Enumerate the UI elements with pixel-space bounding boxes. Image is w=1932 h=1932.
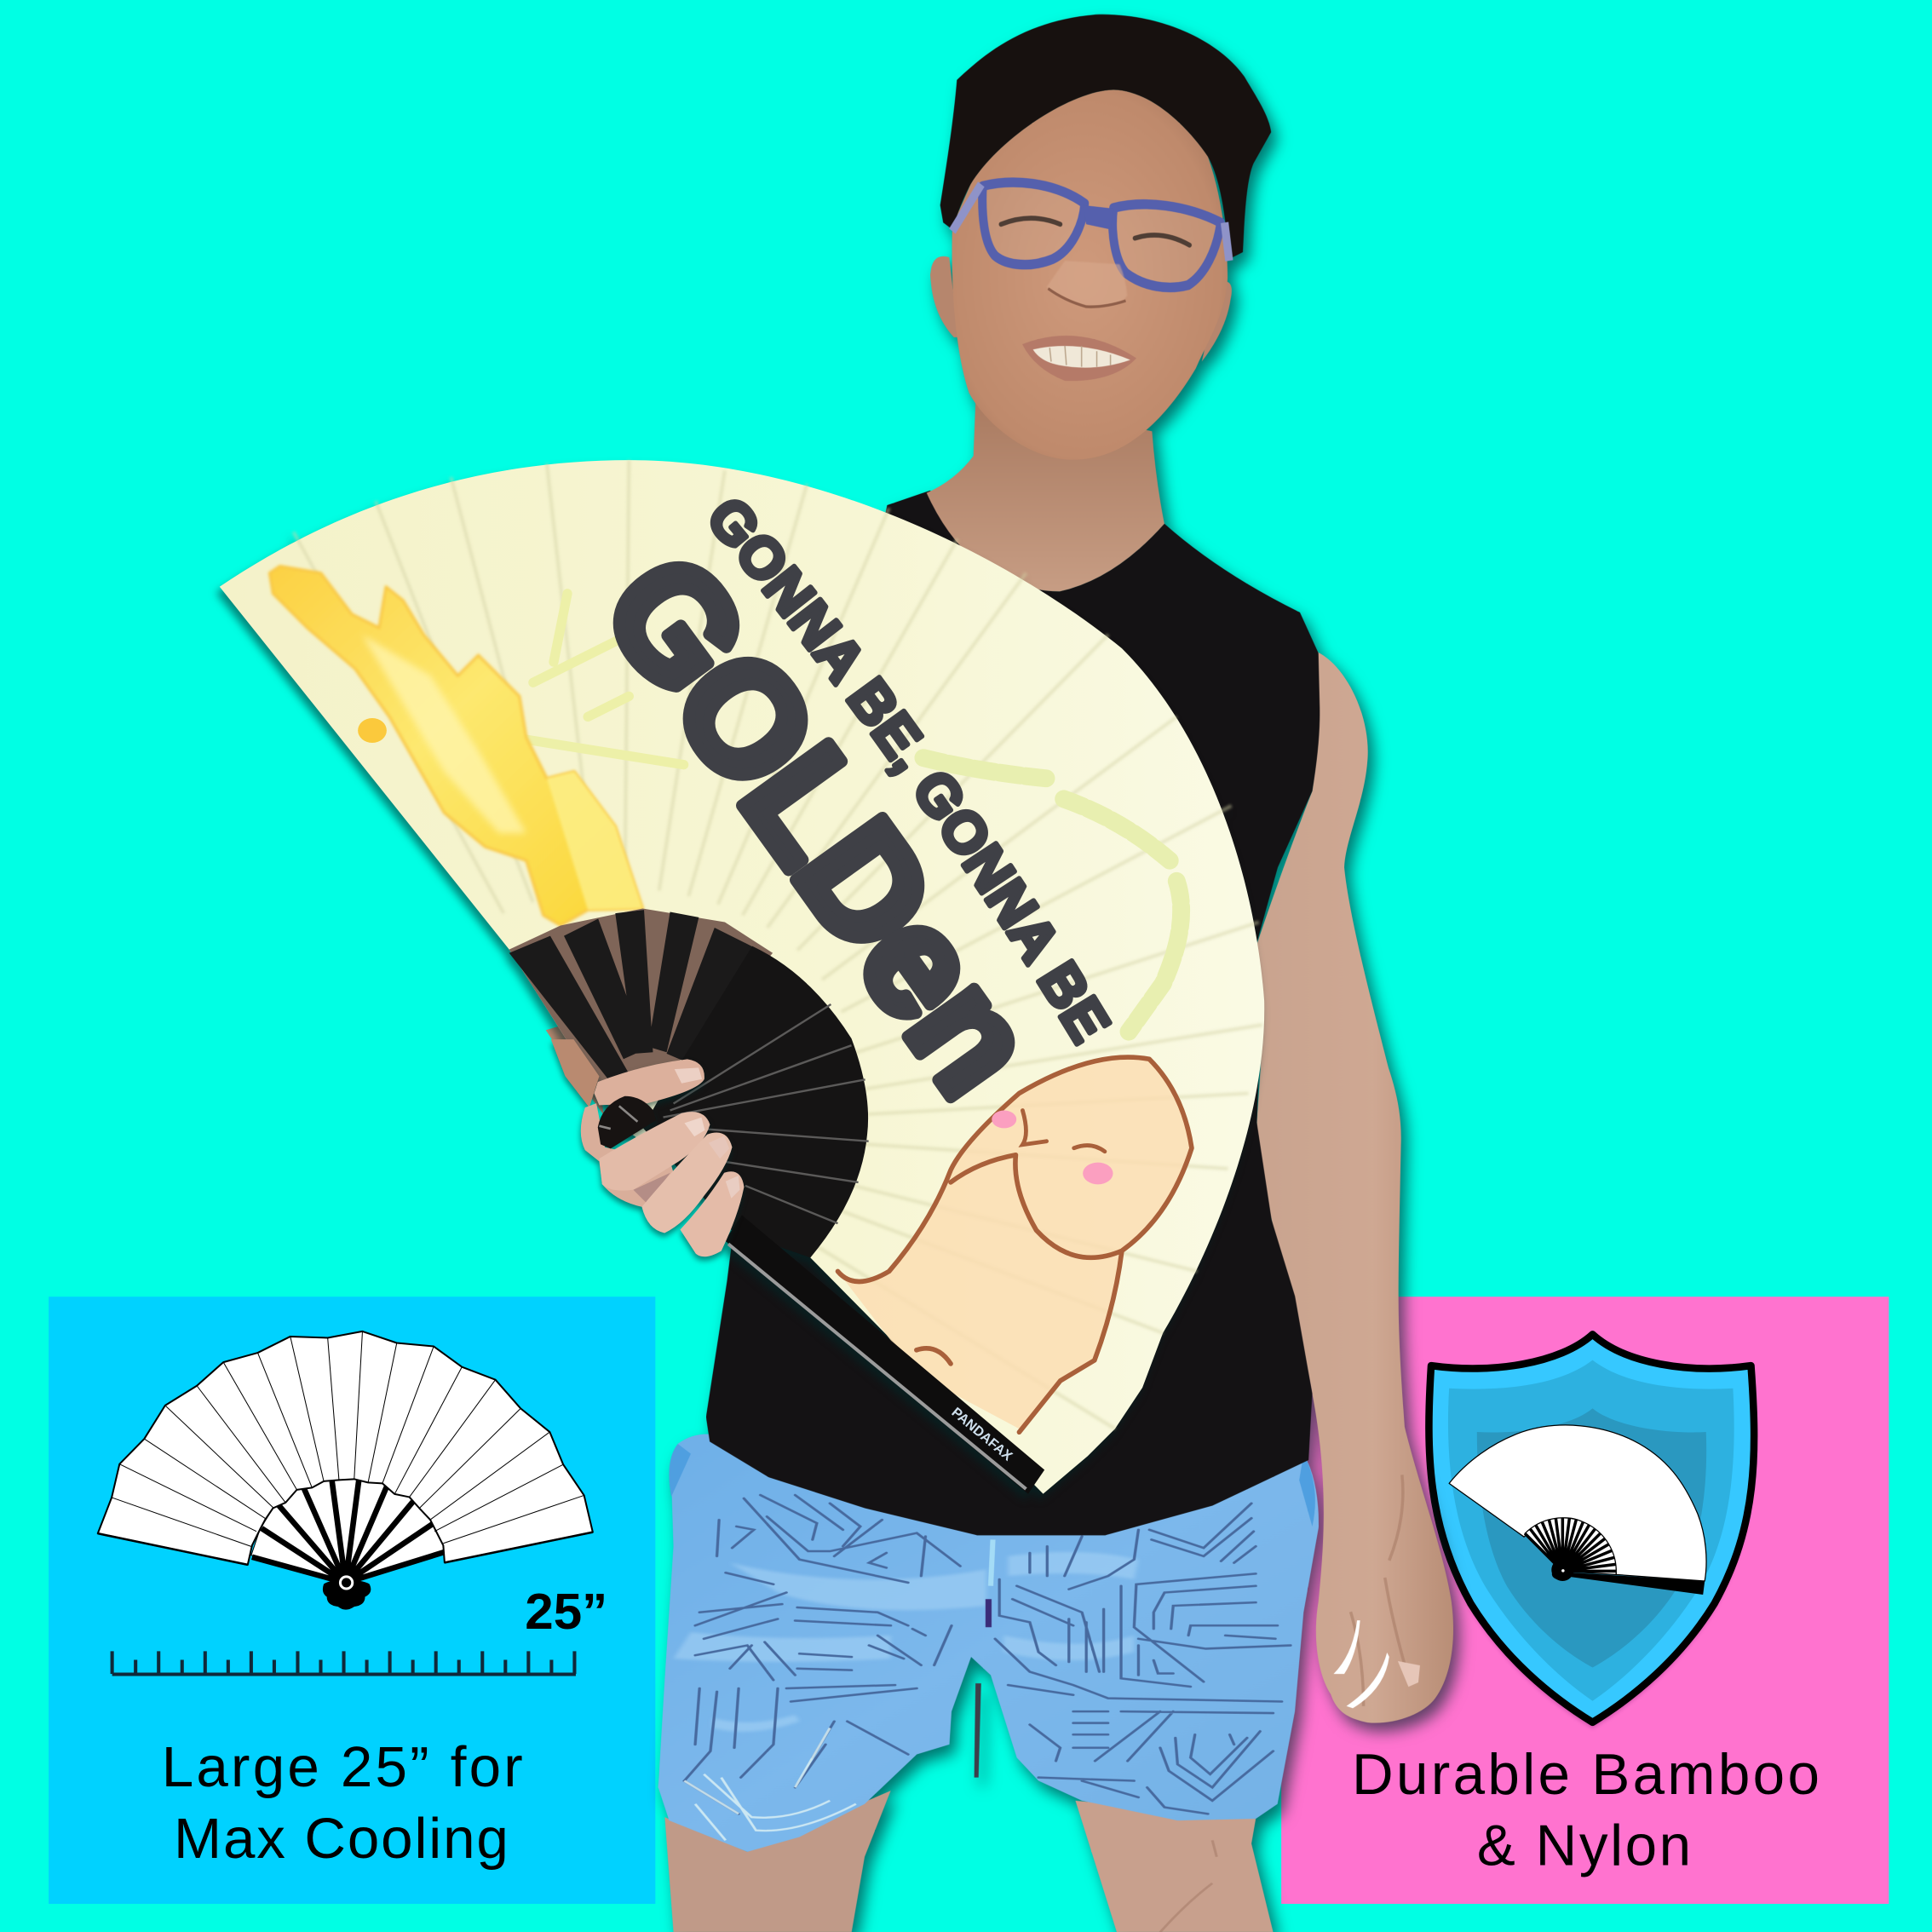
product fan [213, 458, 1267, 1494]
ears [930, 256, 1232, 362]
leaf folds [294, 460, 1262, 1429]
nose [1047, 261, 1127, 306]
head [930, 14, 1271, 460]
icon: open fan outline [98, 1331, 593, 1610]
panel: durability [1281, 1297, 1889, 1904]
neck [927, 394, 1164, 591]
left forearm [546, 1016, 604, 1115]
icon: ruler [112, 1651, 576, 1675]
little finger [680, 1171, 744, 1256]
circuit pattern [684, 1495, 960, 1814]
index finger [594, 1059, 704, 1105]
legs and shorts [658, 1434, 1319, 1932]
caption: size: Large 25” for [162, 1736, 523, 1799]
caption: cooling: Max Cooling [174, 1808, 509, 1871]
holding hand [551, 1039, 744, 1256]
face [952, 89, 1228, 460]
grip [598, 1096, 656, 1148]
fan slogan: GONNA BE, GONNA BE [710, 499, 1113, 1047]
glasses [982, 182, 1221, 287]
caption: nylon: & Nylon [1477, 1814, 1691, 1878]
yellow splash [269, 566, 1182, 1032]
panel: size [49, 1297, 655, 1904]
fan headline: GOLDen [613, 561, 1015, 1104]
shorts [658, 1434, 1319, 1852]
middle finger [599, 1112, 710, 1191]
fan leaf [220, 460, 1264, 1494]
cartoon character [837, 1057, 1192, 1432]
eyes [1001, 218, 1189, 245]
right arm [1253, 652, 1453, 1723]
label: 25 inch dimension: 25” [525, 1584, 607, 1640]
palm [581, 1103, 676, 1207]
handle brand: PANDAFAX [948, 1405, 1015, 1464]
mouth [1022, 336, 1136, 381]
bamboo handle [725, 1215, 1044, 1494]
ring finger [641, 1133, 732, 1233]
shirt [706, 491, 1320, 1535]
bamboo ribs [509, 908, 869, 1257]
right hand fingers [1333, 1475, 1420, 1708]
person [658, 14, 1453, 1932]
icon: shield with fan [1429, 1334, 1754, 1728]
caption: durable: Durable Bamboo [1352, 1743, 1820, 1807]
hair [940, 14, 1271, 259]
